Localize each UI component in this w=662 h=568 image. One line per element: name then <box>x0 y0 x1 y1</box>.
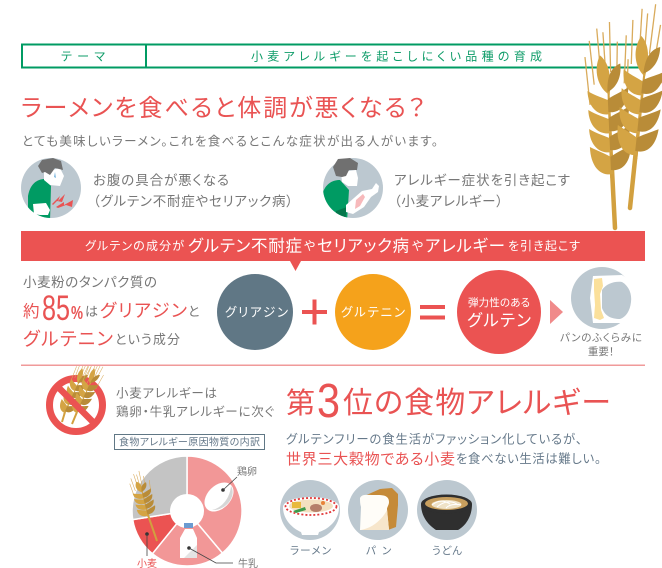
text: wheat flour protein: グリアジン <box>100 301 187 321</box>
text: wheat flour protein: グルテニン <box>23 328 114 350</box>
symptom text: stomach <box>93 172 293 209</box>
circle: elastic gluten: グルテン <box>467 311 531 330</box>
icon: no wheat sign <box>46 366 106 435</box>
text: third most common allergen: 小麦アレルギーは <box>116 386 217 400</box>
plus sign <box>302 300 327 324</box>
caption: bread rising: パンのふくらみに <box>560 332 642 344</box>
label: ramen: ラーメン <box>290 545 331 557</box>
heading: third food allergen: 3 <box>317 375 340 428</box>
symptom text: allergy <box>394 173 570 209</box>
banner: gluten components cause symptoms: アレルギー <box>425 236 505 256</box>
arrow <box>550 300 563 324</box>
banner: gluten components cause symptoms: や <box>412 239 423 253</box>
leader: egg: 鶏卵 <box>237 465 257 478</box>
circle: glutenin: グルテニン <box>341 306 405 320</box>
slice: other <box>132 456 187 520</box>
slice: milk <box>152 511 222 566</box>
banner: gluten components cause symptoms: や <box>304 239 315 253</box>
heading: third food allergen: 位の食物アレルギー <box>343 387 611 420</box>
icon: ramen <box>280 480 340 540</box>
text: wheat flour protein: という成分 <box>115 332 180 347</box>
icon: bread cross-section <box>571 267 637 329</box>
chart legend title <box>114 434 264 450</box>
icon: person with allergy rash <box>322 158 383 222</box>
main heading: ラーメンを食べると体調が悪くなる？ <box>21 95 425 122</box>
theme title: 小麦アレルギーを起こしにくい品種の育成 <box>251 48 542 64</box>
circle: elastic gluten <box>457 270 541 354</box>
text: wheat flour protein: 約 <box>23 302 40 321</box>
banner: gluten components cause symptoms: グルテン不耐症 <box>188 236 302 256</box>
circle: glutenin <box>335 274 411 350</box>
label: udon: うどん <box>432 545 462 557</box>
banner: gluten components cause symptoms: を引き起こす <box>508 239 580 253</box>
text: gluten-free fashion <box>286 432 601 468</box>
banner: gluten components cause symptoms <box>21 231 645 271</box>
icon: egg <box>199 477 239 517</box>
illustration: two wheat ears <box>583 2 662 228</box>
symptom text: allergy: アレルギー症状を引き起こす <box>394 173 570 188</box>
circle: elastic gluten: 弾力性のある <box>468 296 530 309</box>
chart legend title: 食物アレルギー原因物質の内訳 <box>119 436 260 448</box>
icon: bread <box>348 480 408 540</box>
label: bread: パ <box>366 545 377 557</box>
banner: gluten components cause symptoms: セリアック病 <box>317 236 409 256</box>
text: wheat flour protein <box>23 275 199 350</box>
symptom text: stomach: お腹の具合が悪くなる <box>93 172 229 188</box>
pie chart: allergen breakdown <box>127 456 258 568</box>
icon: udon <box>417 480 477 540</box>
label: bread <box>366 545 391 557</box>
slice: wheat <box>133 511 187 554</box>
caption: bread rising <box>560 332 642 358</box>
circle: gliadin <box>217 274 293 350</box>
icon: person with stomach ache <box>21 158 81 222</box>
icon: wheat ear in chart <box>127 469 158 541</box>
theme bar <box>22 44 640 68</box>
text: third most common allergen <box>116 386 274 419</box>
heading: third food allergen: 第 <box>286 387 315 420</box>
text: gluten-free fashion: グルテンフリーの食生活がファッション化しているが、 <box>286 432 582 446</box>
label: bread: ン <box>382 545 391 557</box>
text: gluten-free fashion: を食べない生活は難しい。 <box>456 451 601 466</box>
icon: milk bottle <box>180 523 197 558</box>
text: third most common allergen: 鶏卵・牛乳アレルギーに次ぐ <box>116 404 274 419</box>
equals sign <box>420 305 445 320</box>
caption: bread rising: 重要！ <box>588 345 614 358</box>
divider line <box>21 364 645 366</box>
banner: gluten components cause symptoms: グルテンの成分が <box>85 238 184 253</box>
circle: gliadin: グリアジン <box>225 306 288 320</box>
slice: egg <box>187 456 242 553</box>
text: wheat flour protein: と <box>188 304 199 319</box>
symptom text: allergy: （小麦アレルギー） <box>394 194 503 209</box>
intro sentence: とても美味しいラーメン。これを食べるとこんな症状が出る人がいます。 <box>22 134 438 148</box>
symptom text: stomach: （グルテン不耐症やセリアック病） <box>93 194 293 209</box>
theme label: テーマ <box>61 50 106 64</box>
text: wheat flour protein: 小麦粉のタンパク質の <box>23 275 157 290</box>
text: wheat flour protein: は <box>85 304 98 319</box>
text: wheat flour protein: % <box>71 303 83 323</box>
text: gluten-free fashion: 世界三大穀物である小麦 <box>286 451 455 468</box>
text: wheat flour protein: 85 <box>42 289 70 328</box>
heading: third food allergen <box>286 375 611 428</box>
